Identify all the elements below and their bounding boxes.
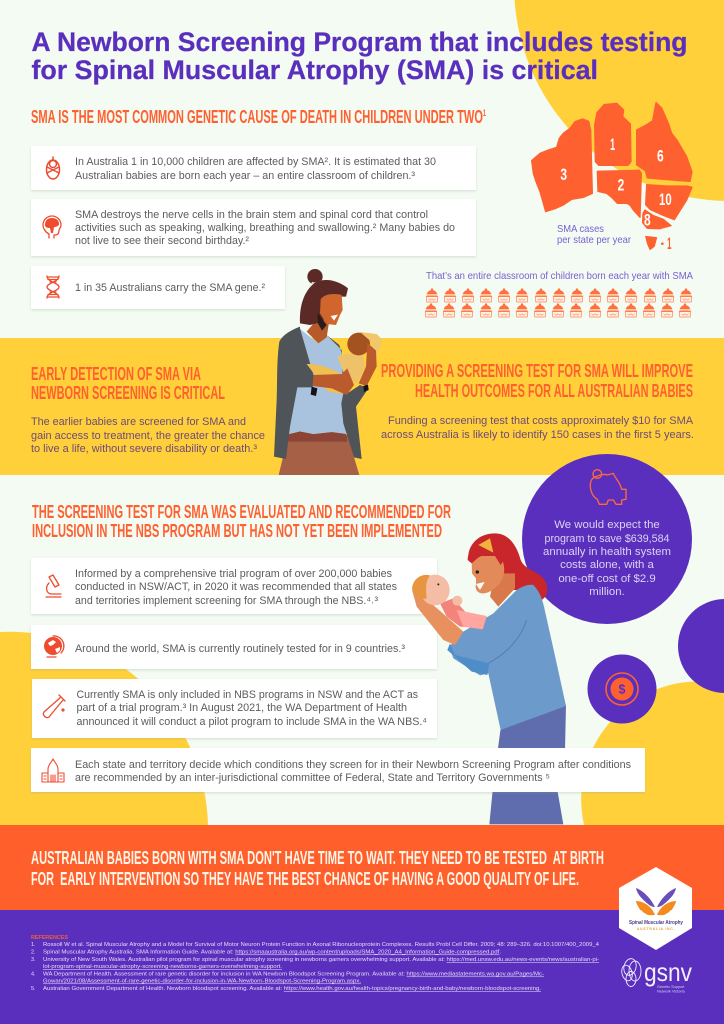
map caption <box>557 223 631 246</box>
map: SMA cases per state <box>532 103 692 253</box>
shirt <box>289 328 346 434</box>
rings <box>620 957 641 986</box>
text <box>75 759 631 784</box>
map caption: per state per year <box>557 234 631 246</box>
icon: parliament building <box>42 759 64 782</box>
logo: gsnv: gsnv <box>644 957 692 987</box>
banner: call to action <box>0 825 724 910</box>
icon: swaddled baby <box>46 157 60 179</box>
heading <box>31 363 225 403</box>
text: Each state and territory decide which conditions they screen for in their Newborn Screening Program after conditions <box>75 759 631 771</box>
logo: Spinal Muscular Atrophy Australia: Spinal Muscular Atrophy <box>629 920 683 926</box>
hair <box>300 280 348 325</box>
VIC <box>643 210 671 229</box>
text <box>75 156 436 182</box>
text: We would expect the <box>554 519 660 531</box>
text: Australian babies are born each year – an entire classroom of children.³ <box>75 170 415 182</box>
text: to live a life, without severe disability or death.³ <box>31 443 257 455</box>
text: costs alone, with a <box>560 559 655 571</box>
jeans <box>489 705 566 824</box>
right cardigan <box>327 335 368 459</box>
face <box>320 294 343 325</box>
WA <box>532 119 592 212</box>
logo: Spinal Muscular Atrophy Australia: AUSTRALIA INC. <box>637 927 675 931</box>
text: The earlier babies are screened for SMA and <box>31 416 246 428</box>
heading: EARLY DETECTION OF SMA VIA <box>31 363 201 384</box>
text: are recommended by an inter-jurisdictional committee of Federal, State and Territory Governments ⁵ <box>75 772 550 784</box>
QLD <box>637 103 692 181</box>
references: 2. <box>31 950 36 956</box>
card: states decide <box>31 748 645 792</box>
headband <box>478 538 493 553</box>
neck <box>307 317 329 343</box>
card: NSW and ACT trial <box>32 679 437 738</box>
heading <box>381 360 693 401</box>
sweater <box>449 585 566 730</box>
heading: NEWBORN SCREENING IS CRITICAL <box>31 382 225 403</box>
icon: test tube <box>43 695 65 718</box>
card: destroys nerve cells <box>31 199 476 256</box>
decorative yellow blob left <box>0 632 208 825</box>
references: Spinal Muscular Atrophy Australia. SMA Information Guide. Available at: https://smaaustralia.org.au/wp-content/uploads/SMA_2020_A4_Information_Guide-compressed.pdf . <box>43 950 501 956</box>
NT <box>595 103 631 165</box>
hair front <box>468 537 508 565</box>
illustration: mother lifting baby <box>412 533 566 824</box>
title: A Newborn Screening Program that includes testing <box>32 27 688 57</box>
text: across Australia is likely to identify 150 cases in the first 5 years. <box>381 429 694 441</box>
logo: gsnv <box>620 957 692 994</box>
SA <box>597 170 641 217</box>
callout: savings circle <box>522 454 692 624</box>
card: 1 in 10,000 <box>31 146 476 190</box>
baby blanket <box>307 364 342 394</box>
text <box>76 689 427 728</box>
references: Australian Government Department of Health. Newborn bloodspot screening. Available at: https://www.health.gov.au/health-topics/pregnancy-birth-and-baby/newborn-bloodspot-screening. <box>43 986 541 992</box>
references <box>31 935 599 992</box>
heading: evaluated and recommended: THE SCREENING TEST FOR SMA WAS EVALUATED AND RECOMMENDED FOR <box>32 501 451 522</box>
hair back <box>468 533 547 600</box>
baby body <box>440 598 487 628</box>
text: million. <box>589 586 625 598</box>
NSW <box>646 185 692 220</box>
text: not live to see their second birthday.² <box>75 235 249 247</box>
text: Around the world, SMA is currently routinely tested for in 9 countries.³ <box>75 643 405 655</box>
text: SMA destroys the nerve cells in the brain stem and spinal cord that control <box>75 209 428 221</box>
panel: early detection <box>31 363 265 455</box>
panel: providing a screening test <box>381 360 694 441</box>
text: Informed by a comprehensive trial program of over 200,000 babies <box>75 568 392 580</box>
text <box>75 209 455 247</box>
map caption: SMA cases <box>557 223 604 235</box>
map: SMA cases per state: 1 <box>667 234 671 253</box>
references: Rossoll W et al. Spinal Muscular Atrophy and a Model for Survival of Motor Neuron Protein Function in Axonal Ribonucleoprotein Complexes. Results Probl Cell Differ. 2009; 48: 289–326. doi:10.1007/400_2009_4 <box>43 942 599 948</box>
references: Gowan/2021/08/Assessment-of-rare-genetic-disorder-for-inclusion-in-WA-Newborn-Bloodspot-Screening-Program.aspx. <box>43 978 361 984</box>
state numbers: 2 <box>618 175 624 194</box>
baby body <box>337 353 365 384</box>
logo: gsnv: Genetic Support <box>657 985 685 989</box>
state numbers <box>560 135 672 253</box>
left sleeve <box>279 347 313 387</box>
baby head <box>347 333 370 355</box>
icon: globe <box>44 636 64 657</box>
text: gain access to treatment, the greater the chance <box>31 430 265 442</box>
state numbers: 1 <box>610 135 615 154</box>
card: trial program <box>31 558 437 614</box>
state numbers: 6 <box>657 147 664 166</box>
text: part of a trial program.³ In August 2021, the WA Department of Health <box>76 702 407 714</box>
baby hands <box>452 596 462 606</box>
references: University of New South Wales. Australian pilot program for spinal muscular atrophy screening in newborns garners overwhelming support. Available at: https://med.unsw.edu.au/news-events/news/australian-pi- <box>43 957 599 963</box>
face <box>472 554 504 593</box>
logo: gsnv: Network Victoria <box>657 990 685 994</box>
TAS <box>646 236 657 250</box>
skirt <box>279 435 359 475</box>
cuff <box>447 643 489 675</box>
icon: brain head <box>43 216 61 238</box>
icon: dollar coin <box>588 654 656 724</box>
text <box>31 416 265 455</box>
decorative yellow circle top right <box>514 0 724 201</box>
icon: dollar coin: $ <box>619 682 626 696</box>
title: for Spinal Muscular Atrophy (SMA) is critical <box>32 55 598 85</box>
references: 3. <box>31 957 36 963</box>
text: conducted in NSW/ACT, in 2020 it was recommended that all states <box>75 581 397 593</box>
references: 4. <box>31 972 36 978</box>
decorative yellow blob right <box>581 681 724 825</box>
icon: microscope <box>46 575 61 597</box>
text: and territories implement screening for SMA through the NBS.⁴˒³ <box>75 595 378 607</box>
classroom caption: That’s an entire classroom of children born each year with SMA <box>426 270 693 282</box>
text: announced it will conduct a pilot program to include SMA in the WA NBS.⁴ <box>76 716 427 728</box>
references: WA Department of Health. Assessment of rare genetic disorder for inclusion in WA Newborn Bloodspot Screening Program. Available at: https://www.mediastatements.wa.gov.au/Pages/Mc- <box>43 972 544 978</box>
hand <box>359 343 377 386</box>
state numbers: 8 <box>644 211 651 230</box>
logo: Spinal Muscular Atrophy Australia <box>619 867 692 950</box>
references: 1. <box>31 942 36 948</box>
arm <box>412 587 463 645</box>
text: program to save $639,584 <box>544 533 670 545</box>
text: Currently SMA is only included in NBS programs in NSW and the ACT as <box>76 689 418 701</box>
text: In Australia 1 in 10,000 children are affected by SMA². It is estimated that 30 <box>75 156 436 168</box>
banner text <box>31 847 604 889</box>
references: REFERENCES <box>31 935 68 941</box>
icon: piggy bank <box>590 470 626 504</box>
left cardigan <box>274 327 317 459</box>
decorative purple circle right <box>678 599 724 693</box>
text: one-off cost of $2.9 <box>558 573 656 585</box>
card: 9 countries <box>31 625 437 669</box>
footer band <box>0 910 724 1024</box>
heading: evaluated and recommended: INCLUSION IN THE NBS PROGRAM BUT HAS NOT YET BEEN IMPLEMENTED <box>32 520 442 541</box>
butterfly wings <box>636 888 676 915</box>
state numbers: 3 <box>560 165 567 184</box>
text <box>381 415 694 441</box>
yellow band <box>0 338 724 475</box>
baby head <box>420 575 450 605</box>
text: activities such as speaking, walking, breathing and swallowing.² Many babies do <box>75 222 455 234</box>
card: 1 in 35 carriers <box>31 266 285 309</box>
text <box>543 519 671 598</box>
icon grid: 30 babies <box>425 288 692 317</box>
references: 5. <box>31 986 36 992</box>
state numbers: 10 <box>659 190 672 209</box>
text: Funding a screening test that costs approximately $10 for SMA <box>388 415 693 427</box>
icon: DNA <box>47 276 59 298</box>
text: annually in health system <box>543 546 671 558</box>
title <box>32 27 688 85</box>
text <box>75 568 397 607</box>
heading: evaluated and recommended <box>32 501 451 541</box>
heading: most common genetic cause: 1 <box>483 108 486 118</box>
illustration: mother holding baby <box>274 269 383 475</box>
arm <box>313 368 354 395</box>
text: 1 in 35 Australians carry the SMA gene.² <box>75 282 265 294</box>
bun <box>307 269 323 284</box>
references: lot-program-spinal-muscular-atrophy-screening-newborns-garners-overwhelming-support. <box>43 964 282 970</box>
neck <box>490 573 515 607</box>
